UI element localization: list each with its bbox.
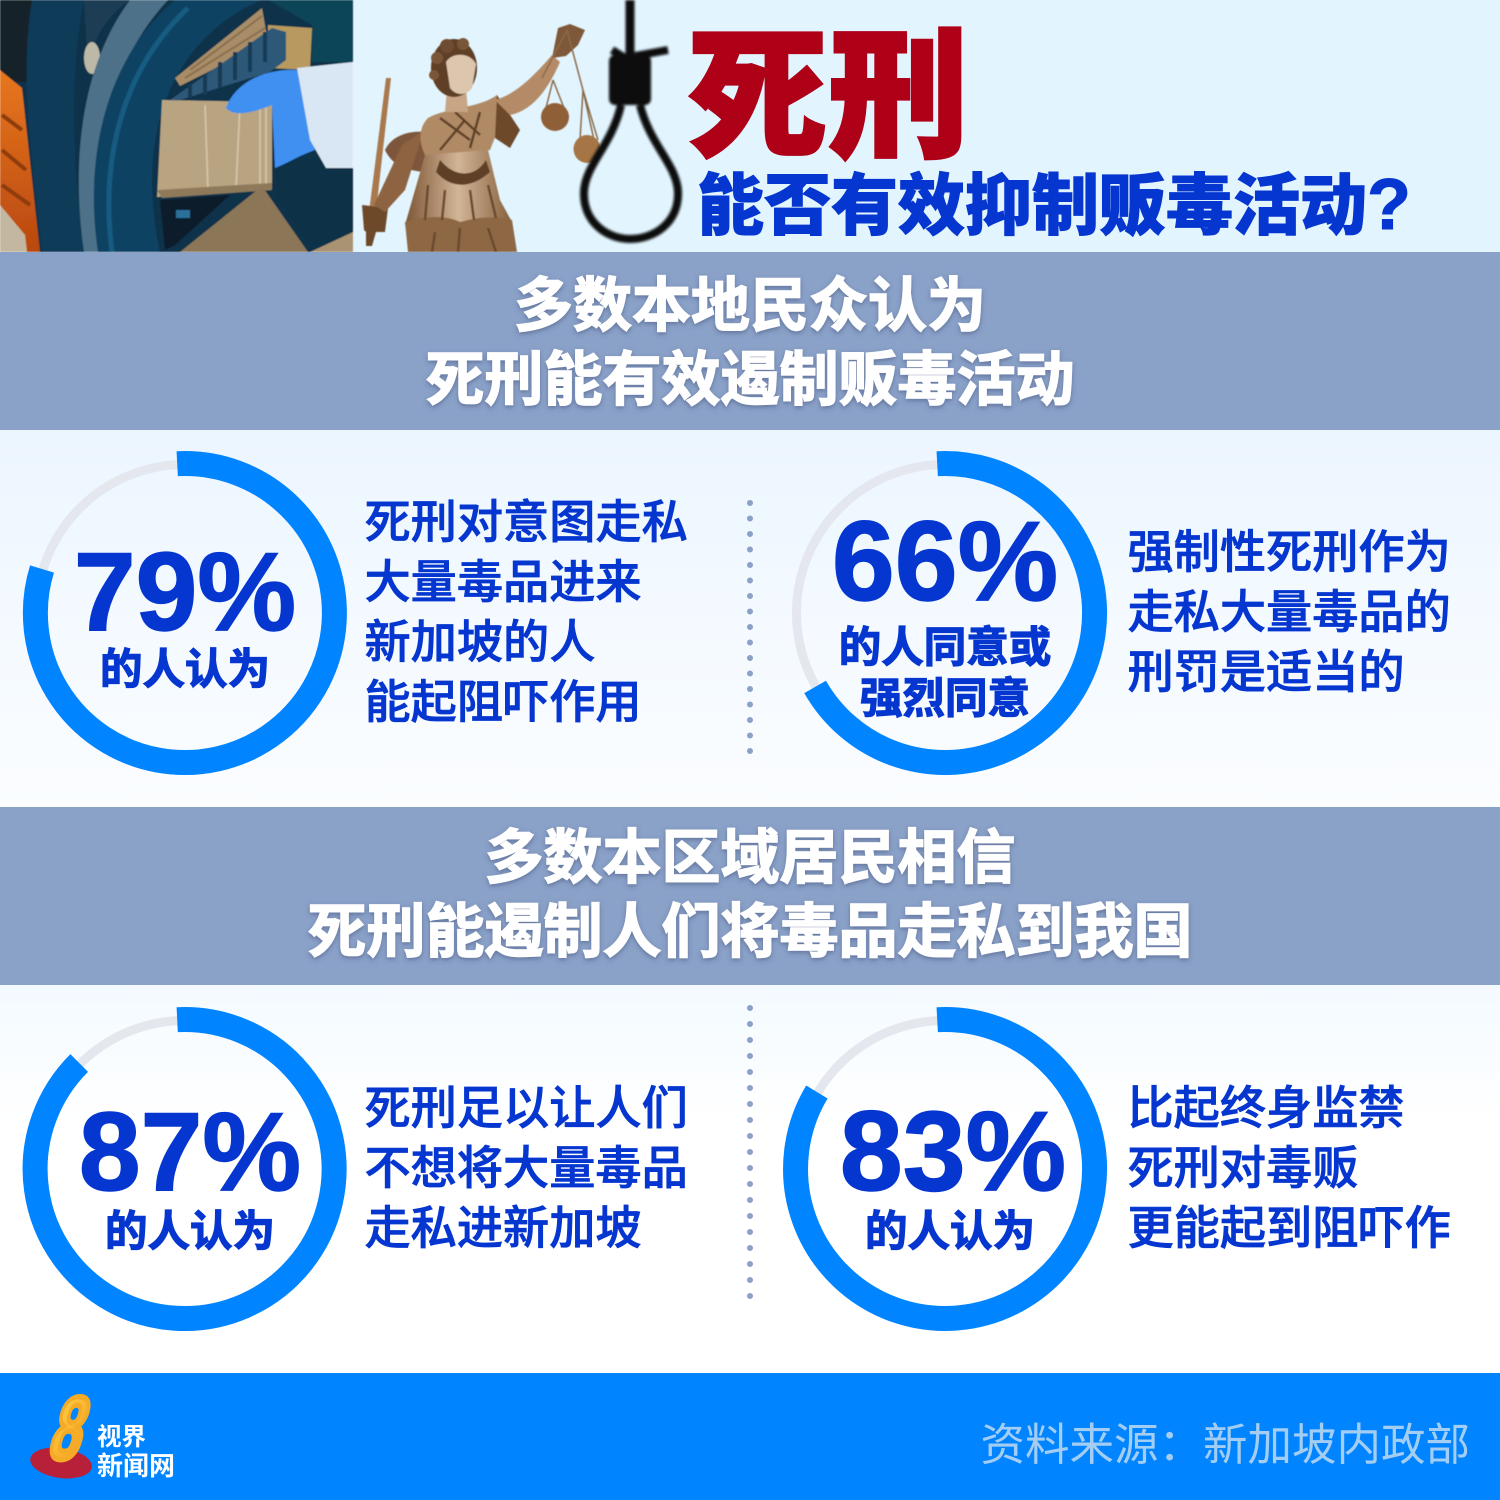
text: 79% description: 大量毒品进来	[364, 545, 642, 612]
section 1 heading text: 死刑能有效遏制贩毒活动	[425, 332, 1075, 417]
text: 87% description: 走私进新加坡	[364, 1191, 642, 1258]
stat: 79%: 的人认为	[100, 636, 270, 697]
text: 87% description	[364, 1071, 688, 1258]
logo: 8 视界新闻网: 8	[40, 1380, 100, 1479]
stat: 79%	[35, 464, 334, 763]
stat: 79%: 79%	[74, 530, 296, 654]
section 1 heading text	[425, 258, 1075, 417]
section 1 heading text: 多数本地民众认为	[514, 258, 986, 343]
text: 83% description: 死刑对毒贩	[1128, 1131, 1358, 1198]
section 2 heading text: 死刑能遏制人们将毒品走私到我国	[307, 884, 1193, 969]
text: 83% description	[1128, 1071, 1451, 1258]
stat: 66%: 66%	[832, 498, 1058, 624]
text: 66% description: 走私大量毒品的	[1128, 575, 1451, 642]
text: 66% description: 强制性死刑作为	[1128, 515, 1451, 582]
text: 83% description: 更能起到阻吓作	[1128, 1191, 1451, 1258]
text: 87% description: 不想将大量毒品	[364, 1131, 688, 1198]
stat: 87%	[35, 1020, 334, 1319]
illustration: hangman's noose	[584, 0, 678, 239]
subtitle: 能否有效抑制贩毒活动?	[697, 152, 1411, 249]
section 1 heading band	[0, 252, 1500, 430]
title	[687, 0, 1411, 249]
text: 79% description	[364, 485, 688, 732]
footer bar	[0, 1373, 1500, 1500]
header banner	[0, 0, 1500, 252]
stat: 83%	[796, 1019, 1095, 1318]
section 2 panel	[0, 985, 1500, 1373]
logo: 8 视界新闻网: 视界	[97, 1418, 146, 1453]
text: 66% description: 刑罚是适当的	[1128, 635, 1405, 702]
stat: 83%: 83%	[840, 1088, 1066, 1214]
stat: 66%: 强烈同意	[860, 665, 1030, 726]
stat: 87%: 的人认为	[105, 1198, 275, 1259]
stat: 66%	[796, 463, 1095, 762]
stat: 83%: 的人认为	[865, 1198, 1035, 1259]
text: 79% description: 死刑对意图走私	[364, 485, 688, 552]
section 1 panel	[0, 430, 1500, 807]
text: 79% description: 能起阻吓作用	[364, 665, 642, 732]
text: 83% description: 比起终身监禁	[1128, 1071, 1405, 1138]
section 2 heading text: 多数本区域居民相信	[484, 810, 1016, 895]
illustration: Lady Justice statue	[362, 24, 600, 252]
logo: 8 视界新闻网: 新闻网	[97, 1446, 175, 1483]
source credit: 资料来源：新加坡内政部	[980, 1408, 1470, 1473]
text: 87% description: 死刑足以让人们	[364, 1071, 688, 1138]
section 2 heading band	[0, 807, 1500, 985]
stat: 87%: 87%	[79, 1090, 301, 1214]
logo: 8 视界新闻网	[28, 1380, 175, 1483]
text: 66% description	[1128, 515, 1451, 702]
section 2 heading text	[307, 810, 1193, 969]
text: 79% description: 新加坡的人	[364, 605, 595, 672]
photo: gloved hand pulling drug package from car door	[0, 0, 353, 252]
stat: 66%: 的人同意或	[839, 614, 1051, 675]
